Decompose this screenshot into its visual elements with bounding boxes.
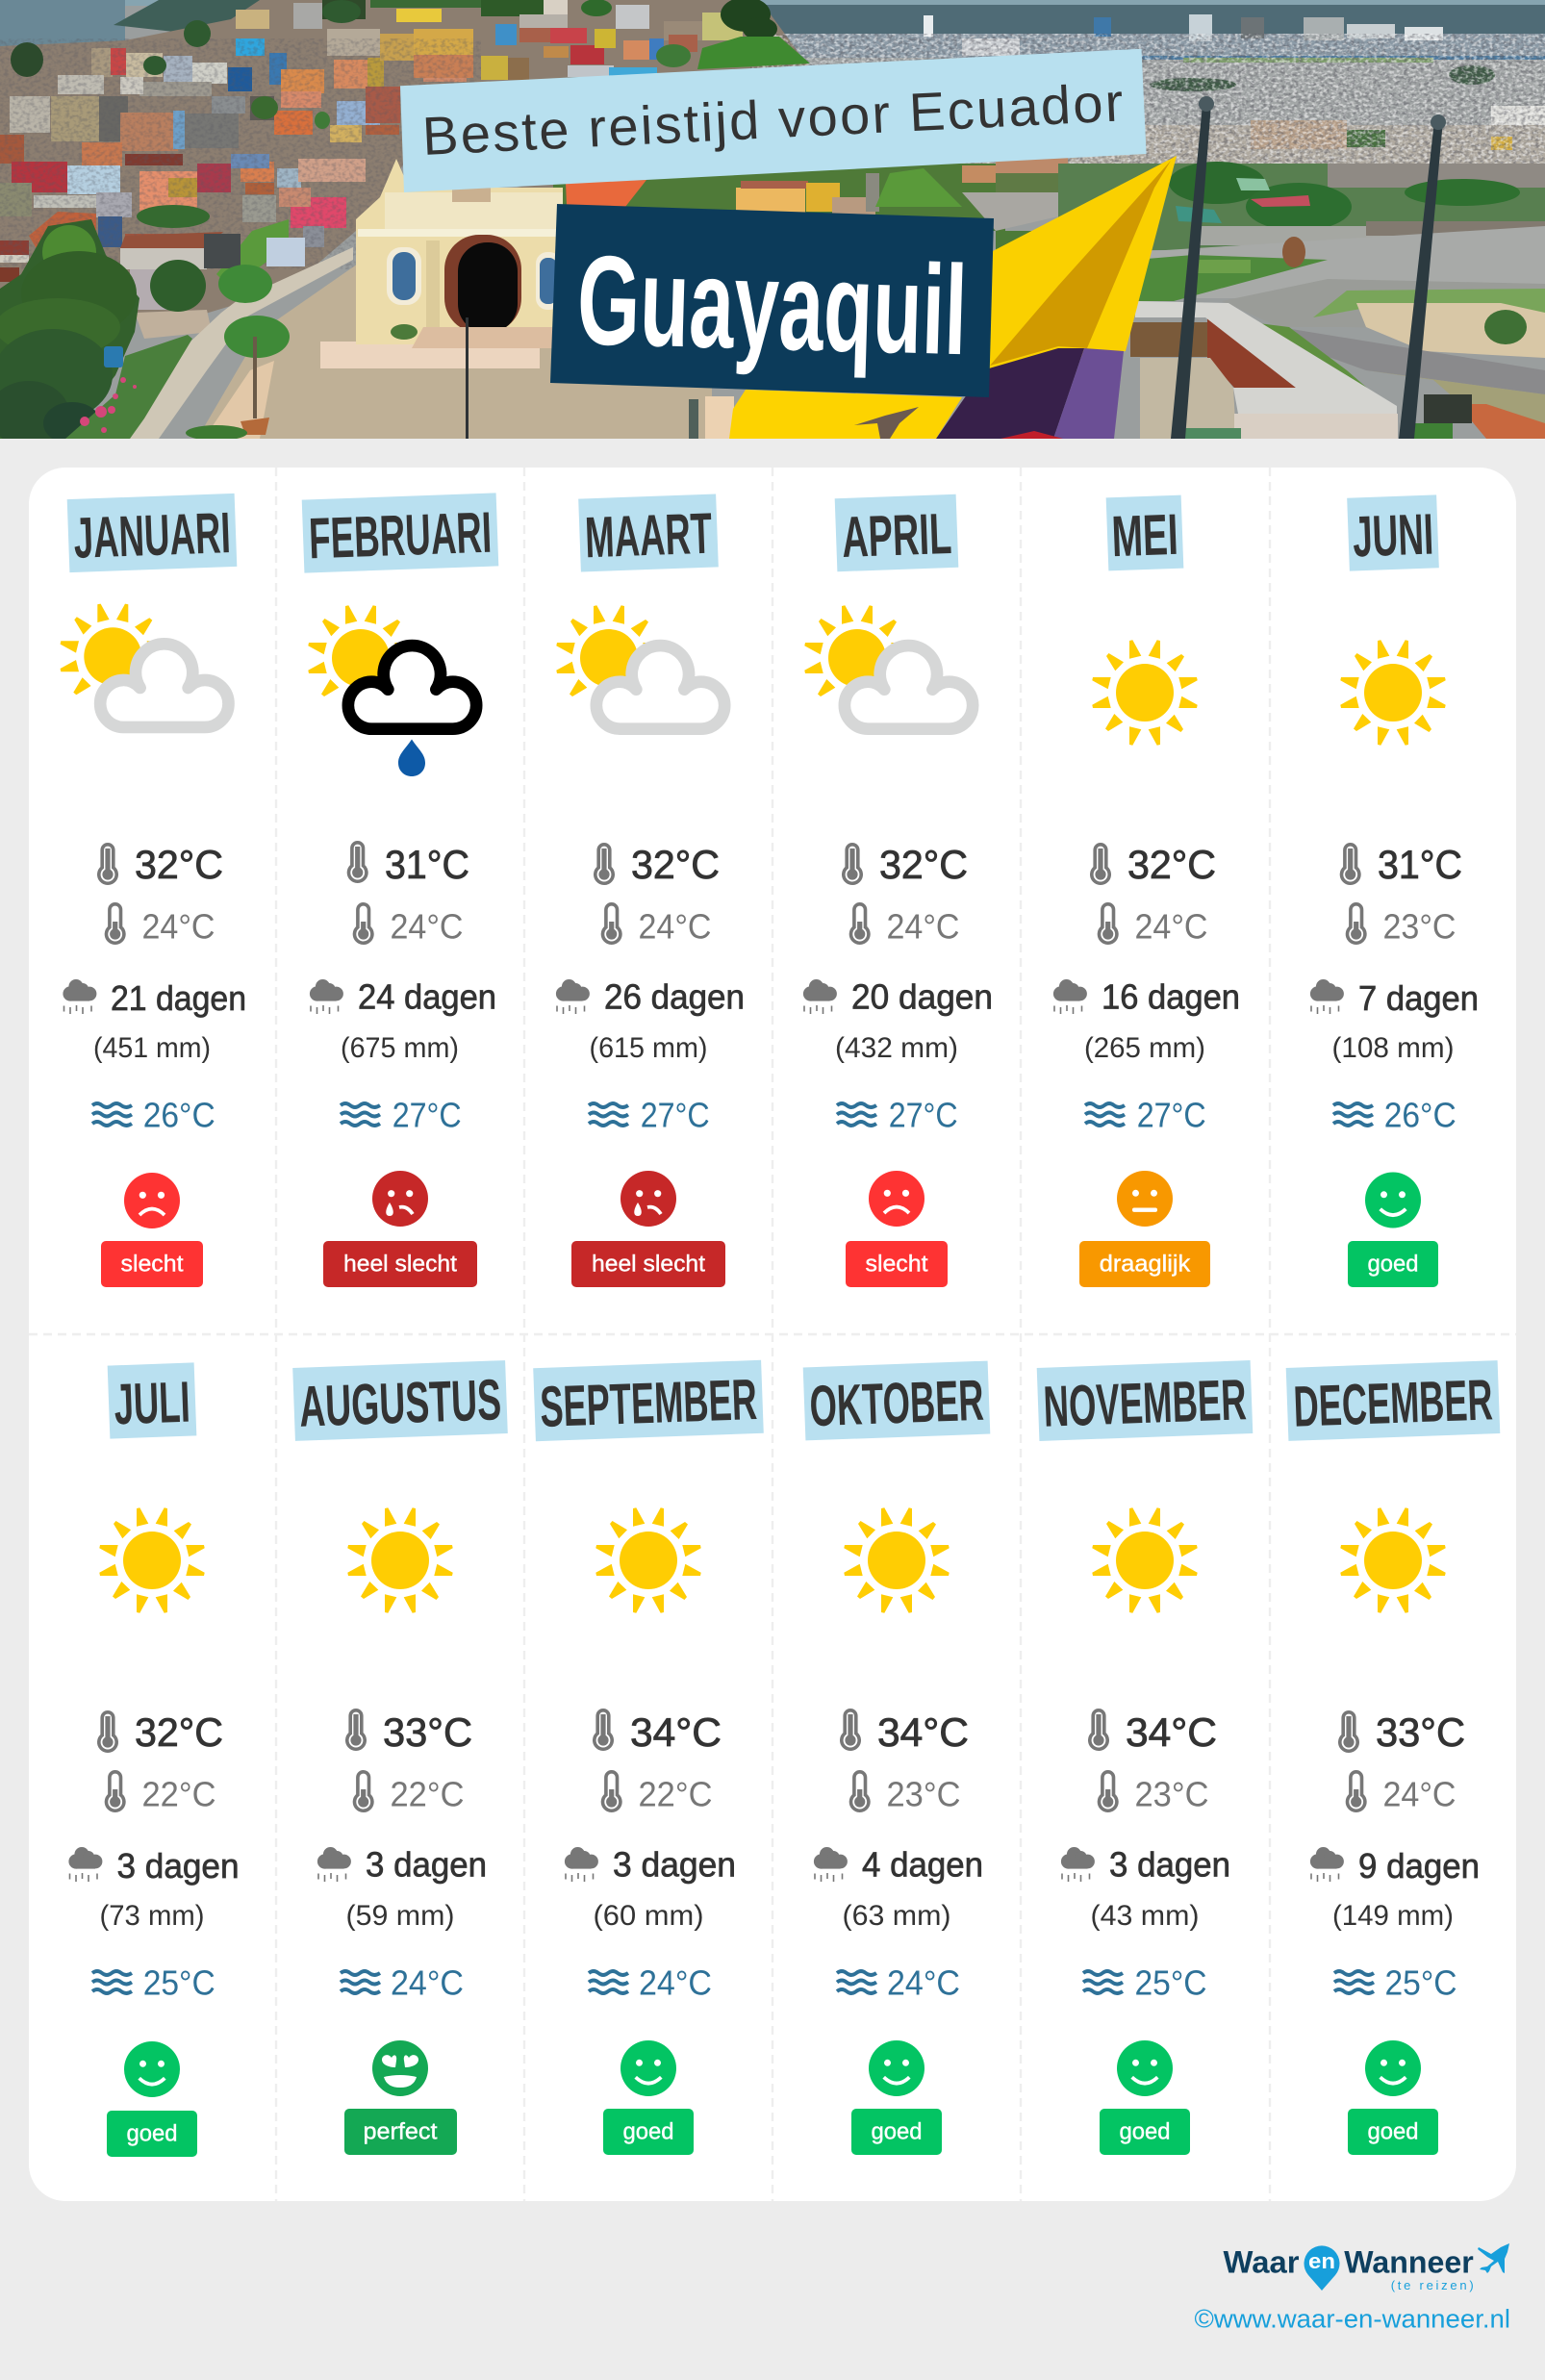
icon: sun	[1340, 1507, 1446, 1613]
rainfall: (59 mm)	[345, 1900, 455, 1932]
rainfall: (63 mm)	[842, 1900, 951, 1932]
rating badge: goed	[1120, 2118, 1170, 2145]
label april: APRIL	[841, 501, 952, 570]
colourful houses	[0, 0, 743, 282]
rating face	[869, 1171, 924, 1227]
sea temperature: 26°C	[1384, 1095, 1456, 1135]
rainfall: (675 mm)	[341, 1032, 459, 1064]
rating badge: goed	[623, 2118, 673, 2145]
rainfall: (43 mm)	[1090, 1900, 1200, 1932]
label januari: JANUARI	[72, 500, 232, 570]
right-hand greenery, roads and plaza	[1058, 164, 1545, 250]
rain days: 16 dagen	[1102, 977, 1240, 1016]
header photo: Guayaquil cityscape with flag	[0, 0, 1545, 446]
logo: Waar en Wanneer	[1224, 2243, 1509, 2292]
rating badge: goed	[1368, 1251, 1418, 1278]
palms	[224, 316, 290, 358]
rain days: 21 dagen	[111, 978, 246, 1018]
hillside base	[0, 0, 813, 317]
rainfall: (432 mm)	[835, 1032, 958, 1064]
icon: sun	[99, 1507, 205, 1613]
logo: Waar en Wanneer: en	[1308, 2249, 1335, 2273]
low temperature	[602, 904, 712, 947]
rainfall: (615 mm)	[589, 1032, 708, 1064]
label september: SEPTEMBER	[539, 1367, 758, 1439]
rating badge: slecht	[866, 1251, 928, 1278]
icon: sun	[595, 1507, 701, 1613]
icon: sun	[1092, 1507, 1198, 1613]
rating face	[1365, 1172, 1421, 1228]
rating face	[372, 1171, 428, 1227]
low temperature: 23°C	[1383, 906, 1456, 947]
sea temperature	[341, 1095, 462, 1135]
rain days: 20 dagen	[851, 977, 993, 1016]
month: december	[1286, 1360, 1500, 2155]
sea temperature	[1085, 1095, 1206, 1135]
low temperature	[1099, 1772, 1208, 1814]
hillside lower: houses, roofs and slope	[216, 219, 289, 277]
icon: sun behind cloud	[61, 604, 228, 727]
month: juni	[1310, 494, 1479, 1287]
rainfall: (73 mm)	[100, 1900, 204, 1932]
rain days: 3 dagen	[1109, 1845, 1230, 1884]
rating badge	[1348, 2109, 1438, 2155]
rating badge	[1079, 1241, 1210, 1287]
sea temperature: 27°C	[889, 1095, 958, 1135]
sea temperature	[589, 1962, 712, 2003]
icon: sun behind cloud	[556, 605, 724, 729]
label mei: MEI	[1110, 502, 1179, 569]
sea temperature: 24°C	[639, 1962, 712, 2003]
rain days	[1310, 978, 1479, 1018]
high temperature: 32°C	[631, 842, 720, 887]
rain days	[814, 1845, 983, 1884]
high temperature: 34°C	[1126, 1709, 1217, 1755]
label oktober	[803, 1361, 990, 1440]
high temperature: 31°C	[385, 842, 469, 887]
heading box: Guayaquil	[550, 204, 994, 397]
label augustus	[292, 1360, 508, 1441]
sea temperature	[1333, 1095, 1456, 1135]
sea temperature: 24°C	[391, 1962, 464, 2003]
rating badge	[851, 2109, 942, 2155]
month: november	[1037, 1360, 1253, 2155]
rating badge	[571, 1241, 725, 1287]
rating badge	[107, 2111, 197, 2157]
month: juli	[68, 1362, 240, 2157]
sea temperature: 27°C	[1137, 1095, 1206, 1135]
label juli	[108, 1362, 196, 1439]
low temperature	[1347, 1772, 1456, 1814]
sea temperature	[341, 1962, 464, 2003]
sea temperature: 24°C	[887, 1962, 960, 2003]
high temperature: 32°C	[1127, 842, 1216, 887]
month: januari	[61, 494, 246, 1287]
low temperature: 22°C	[639, 1774, 712, 1814]
high temperature: 33°C	[383, 1709, 472, 1755]
label augustus: AUGUSTUS	[298, 1367, 502, 1439]
month: mei	[1053, 495, 1240, 1287]
rating badge: goed	[1368, 2118, 1418, 2145]
rain days: 7 dagen	[1358, 978, 1479, 1018]
rain days: 9 dagen	[1358, 1846, 1480, 1886]
icon: sun	[844, 1507, 950, 1613]
school building	[1130, 322, 1207, 357]
middle band behind banner	[553, 164, 1005, 231]
month: september	[533, 1360, 764, 2155]
rating badge: goed	[872, 2118, 922, 2145]
grain over hillside and city	[0, 38, 481, 269]
copyright line: ©www.waar-en-wanneer.nl	[1195, 2305, 1510, 2334]
month: oktober	[803, 1361, 990, 2155]
low temperature: 24°C	[391, 906, 464, 947]
icon: sun	[347, 1507, 453, 1613]
high temperature: 32°C	[879, 842, 968, 887]
rating face	[124, 1173, 180, 1228]
rating face	[1365, 2040, 1421, 2096]
sea temperature	[837, 1095, 958, 1135]
rating badge: goed	[127, 2120, 177, 2147]
rain days	[317, 1845, 487, 1884]
rating badge	[846, 1241, 948, 1287]
low temperature	[106, 904, 215, 947]
month: augustus	[292, 1360, 508, 2155]
high temperature: 32°C	[135, 842, 223, 887]
high temperature: 34°C	[630, 1709, 722, 1755]
low temperature	[354, 1772, 464, 1814]
low temperature: 23°C	[1135, 1774, 1208, 1814]
icon: sun, black cloud and rain drop	[308, 605, 476, 776]
sea temperature	[92, 1095, 215, 1135]
distant city top left	[0, 0, 125, 46]
flag poles	[1171, 104, 1211, 439]
low temperature	[106, 1772, 215, 1814]
low temperature: 24°C	[1135, 906, 1208, 947]
rating face	[621, 1171, 676, 1227]
low temperature: 24°C	[142, 906, 215, 947]
low temperature: 24°C	[887, 906, 960, 947]
low temperature	[1347, 904, 1456, 947]
rain days: 24 dagen	[358, 977, 496, 1016]
rain days: 26 dagen	[604, 977, 745, 1016]
sea temperature: 27°C	[641, 1095, 710, 1135]
label februari	[302, 493, 498, 573]
rating badge: heel slecht	[343, 1251, 457, 1278]
label maart: MAART	[584, 501, 713, 570]
rainfall: (60 mm)	[594, 1900, 703, 1932]
logo: Waar en Wanneer: Waar	[1224, 2245, 1299, 2280]
sea temperature: 25°C	[1385, 1962, 1456, 2003]
high temperature: 32°C	[135, 1709, 223, 1755]
icon: sun	[1092, 640, 1198, 746]
rating face	[621, 2040, 676, 2096]
sea temperature: 26°C	[143, 1095, 215, 1135]
rating badge	[1100, 2109, 1190, 2155]
rating face	[1117, 1171, 1173, 1227]
label juni: JUNI	[1352, 502, 1434, 569]
label juli: JULI	[113, 1370, 191, 1436]
high temperature: 31°C	[1378, 842, 1462, 887]
rating badge: draaglijk	[1100, 1251, 1191, 1278]
rain days	[1310, 1846, 1480, 1886]
low temperature	[1099, 904, 1208, 947]
rating badge	[1348, 1241, 1438, 1287]
heading box: Guayaquil: Guayaquil	[575, 229, 969, 381]
low temperature: 24°C	[1383, 1774, 1456, 1814]
rating badge: perfect	[364, 2118, 438, 2145]
label oktober: OKTOBER	[808, 1368, 985, 1438]
rating face	[1117, 2040, 1173, 2096]
sea temperature: 25°C	[143, 1962, 215, 2003]
low temperature: 22°C	[391, 1774, 464, 1814]
label maart	[578, 494, 719, 572]
high temperature	[1341, 842, 1462, 887]
sea temperature	[589, 1095, 710, 1135]
icon: airplane	[1478, 2243, 1509, 2273]
label juni	[1347, 494, 1439, 571]
terrace and wall	[197, 262, 712, 439]
label september	[533, 1360, 764, 1441]
trees and bushes lower left	[0, 219, 139, 439]
low temperature: 22°C	[142, 1774, 215, 1814]
label november: NOVEMBER	[1042, 1367, 1248, 1439]
label februari: FEBRUARI	[308, 500, 493, 570]
logo: Waar en Wanneer: (te reizen)	[1391, 2278, 1474, 2292]
icon: sun	[1340, 640, 1446, 746]
rating badge	[603, 2109, 694, 2155]
sea temperature	[92, 1962, 215, 2003]
title banner: Beste reistijd voor Ecuador	[400, 49, 1147, 192]
sea temperature	[837, 1962, 960, 2003]
rating badge	[344, 2109, 457, 2155]
rainfall: (451 mm)	[93, 1032, 211, 1064]
rainfall: (265 mm)	[1084, 1032, 1205, 1064]
low temperature	[850, 1772, 960, 1814]
logo: Waar en Wanneer: Wanneer	[1344, 2245, 1474, 2280]
rating badge	[323, 1241, 477, 1287]
rating face	[869, 2040, 924, 2096]
rain days	[1061, 1845, 1230, 1884]
high temperature	[348, 842, 469, 887]
sea temperature: 25°C	[1135, 1962, 1206, 2003]
month: april	[803, 494, 993, 1287]
rain days: 3 dagen	[117, 1846, 239, 1886]
rain days: 3 dagen	[613, 1845, 736, 1884]
rating face	[124, 2041, 180, 2097]
sea temperature	[1083, 1962, 1206, 2003]
icon: map pin	[1304, 2245, 1339, 2291]
label november	[1037, 1360, 1253, 1441]
low temperature	[354, 904, 464, 947]
high temperature: 34°C	[877, 1709, 969, 1755]
rainfall: (149 mm)	[1332, 1900, 1454, 1932]
rating badge	[101, 1241, 203, 1287]
sea temperature	[1334, 1962, 1456, 2003]
rain days: 4 dagen	[862, 1845, 983, 1884]
low temperature	[602, 1772, 712, 1814]
church	[356, 159, 563, 344]
panel: monthly climate card	[29, 468, 1516, 2201]
low temperature: 23°C	[887, 1774, 960, 1814]
high temperature: 33°C	[1376, 1709, 1465, 1755]
title banner: Beste reistijd voor Ecuador: Beste reistijd voor Ecuador	[421, 71, 1125, 166]
rainfall: (108 mm)	[1331, 1032, 1455, 1064]
low temperature: 24°C	[639, 906, 712, 947]
label januari	[67, 494, 237, 572]
rain days: 3 dagen	[366, 1845, 487, 1884]
label mei	[1106, 495, 1183, 570]
rating badge: heel slecht	[592, 1251, 705, 1278]
icon: sun behind cloud	[804, 605, 973, 729]
month: februari	[302, 493, 498, 1287]
rating badge: slecht	[121, 1251, 184, 1278]
sea temperature: 27°C	[393, 1095, 462, 1135]
label april	[835, 494, 958, 571]
low temperature	[850, 904, 960, 947]
flag	[989, 156, 1177, 370]
rating face	[372, 2040, 428, 2096]
month: maart	[556, 494, 745, 1287]
houses upper centre	[414, 29, 473, 55]
